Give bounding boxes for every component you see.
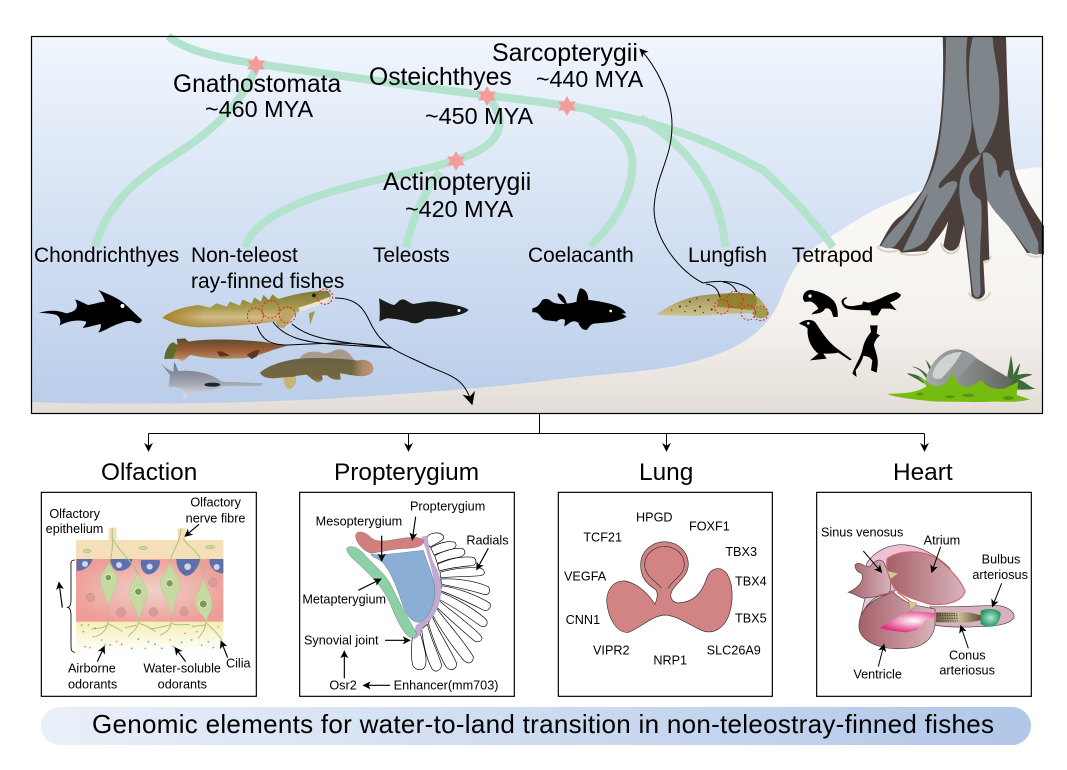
olfaction labels: Olfactory [49, 507, 101, 521]
silhouette: teleost [379, 298, 469, 323]
arrow: fish regions to genomic panels [257, 298, 472, 404]
propterygium labels [302, 499, 509, 692]
pointer arrows [59, 524, 228, 662]
panel: evolutionary tree scene [31, 36, 1044, 414]
clade labels: Osteichthyes [369, 64, 512, 91]
pointer arrows [863, 547, 1002, 667]
propterygium labels: Radials [466, 533, 509, 547]
clade labels: ~450 MYA [425, 103, 534, 129]
pointer arrows [344, 517, 488, 685]
photo-style fish: gar [164, 338, 288, 362]
silhouette: chondrichthyes shark [39, 290, 142, 333]
lineage labels: Lungfish [688, 244, 767, 267]
olfaction labels: epithelium [46, 522, 103, 536]
olfaction labels: odorants [158, 677, 207, 691]
panel: olfaction [41, 492, 256, 696]
olfaction labels: Water-soluble [143, 662, 221, 676]
photo-style fish: lungfish [656, 291, 768, 321]
clade labels: ~420 MYA [405, 196, 514, 222]
panel border [32, 36, 1042, 414]
heading: Lung: Lung [639, 459, 693, 486]
heart labels: arteriosus [939, 664, 995, 678]
heading: Olfaction: Olfaction [101, 459, 197, 486]
red dashed circles on bichir [247, 289, 333, 324]
panel: lung [558, 492, 772, 696]
gene labels: SLC26A9 [707, 644, 761, 658]
bulbus arteriosus green [981, 609, 1001, 627]
clade labels: ~440 MYA [536, 66, 644, 92]
propterygium labels: Mesopterygium [316, 515, 402, 529]
olfaction labels: nerve fibre [186, 512, 245, 526]
olfaction labels: Cilia [226, 657, 252, 671]
gene labels: HPGD [636, 511, 673, 525]
heart labels: Ventricle [853, 667, 902, 681]
nuclei [105, 574, 207, 608]
ventricle lumen [879, 611, 942, 632]
mesopterygium blue [371, 550, 435, 622]
lineage labels [34, 244, 873, 293]
basal cells [77, 559, 223, 576]
shark eye [120, 304, 124, 308]
lineage labels: Coelacanth [528, 244, 634, 267]
lineage labels: Tetrapod [792, 244, 873, 267]
silhouette: runner [852, 325, 880, 377]
lineage labels: Non-teleost [191, 244, 298, 267]
gene labels: VIPR2 [593, 643, 630, 657]
silhouette: frog [803, 290, 838, 317]
valves [887, 571, 898, 579]
gene labels: TCF21 [583, 531, 622, 545]
gene labels [564, 511, 767, 668]
propterygium labels: Propterygium [410, 499, 485, 513]
heart labels: Conus [949, 649, 986, 663]
rock and grass [887, 349, 1036, 402]
lineage labels: ray-finned fishes [191, 270, 344, 293]
heading: Propterygium: Propterygium [334, 459, 479, 486]
radials [412, 533, 490, 671]
gene labels: CNN1 [566, 613, 600, 627]
sand shore [32, 167, 1043, 414]
title banner: Genomic elements for water-to-land transition in non-teleostray-finned fishes [92, 709, 994, 739]
clade labels: Sarcopterygii [492, 39, 638, 67]
teleost eye [458, 309, 460, 312]
olfaction labels: odorants [68, 677, 117, 691]
supporting cells [86, 578, 217, 617]
gene labels: VEGFA [564, 569, 607, 583]
propterygium labels: Metapterygium [302, 593, 386, 607]
water background [31, 36, 1043, 414]
bulbus tube [930, 606, 1014, 627]
atrium [887, 552, 965, 605]
olfaction labels [46, 496, 252, 691]
sinus venosus [848, 560, 891, 598]
tree illustration [878, 36, 1044, 300]
heart labels: Atrium [924, 533, 960, 547]
lineage labels: Chondrichthyes [34, 244, 179, 267]
ventricle [859, 592, 935, 649]
silhouette: coelacanth [532, 288, 627, 330]
silhouette: lizard [842, 292, 901, 315]
odorants dots [81, 624, 214, 649]
bracket [68, 560, 75, 652]
clade labels [173, 39, 644, 222]
olfactory neurons [100, 562, 212, 622]
gene labels: TBX3 [725, 545, 757, 559]
photo-style fish: bichir [162, 291, 331, 328]
heart labels [821, 525, 1028, 681]
lung shape [607, 542, 732, 632]
photo-style fish: bowfin [260, 349, 373, 389]
divergence stars [247, 55, 576, 171]
clade labels: Gnathostomata [173, 71, 341, 98]
gene labels: TBX4 [735, 575, 767, 589]
gene labels: NRP1 [653, 654, 687, 668]
silhouette: bird [799, 320, 852, 360]
gene labels: TBX5 [735, 612, 767, 626]
outer pericardium [861, 545, 950, 617]
propterygium red [356, 532, 424, 553]
arrow: lungfish to Sarcopterygii [640, 49, 703, 283]
heart labels: Sinus venosus [821, 525, 903, 539]
propterygium labels: Synovial joint [304, 633, 379, 647]
lineage labels: Teleosts [373, 244, 450, 267]
heart labels: Bulbus [982, 553, 1020, 567]
photo-style fish: paddlefish [160, 362, 263, 399]
clade labels: ~460 MYA [205, 96, 314, 122]
connector arrows to four panels [148, 414, 924, 451]
clade labels: Actinopterygii [383, 169, 531, 196]
gene labels: FOXF1 [689, 520, 730, 534]
heart labels: arteriosus [972, 568, 1028, 582]
phylogeny branches [95, 36, 833, 247]
metapterygium green [347, 547, 416, 638]
propterygium labels: Enhancer(mm703) [394, 678, 498, 692]
panel: propterygium [300, 492, 514, 696]
olfaction labels: Airborne [68, 662, 116, 676]
panel: heart [817, 492, 1031, 696]
propterygium labels: Osr2 [329, 678, 357, 692]
conus arteriosus [936, 612, 982, 622]
olfaction labels: Olfactory [190, 496, 242, 510]
purple cartilage band [413, 536, 441, 640]
heading: Heart: Heart [893, 459, 953, 486]
